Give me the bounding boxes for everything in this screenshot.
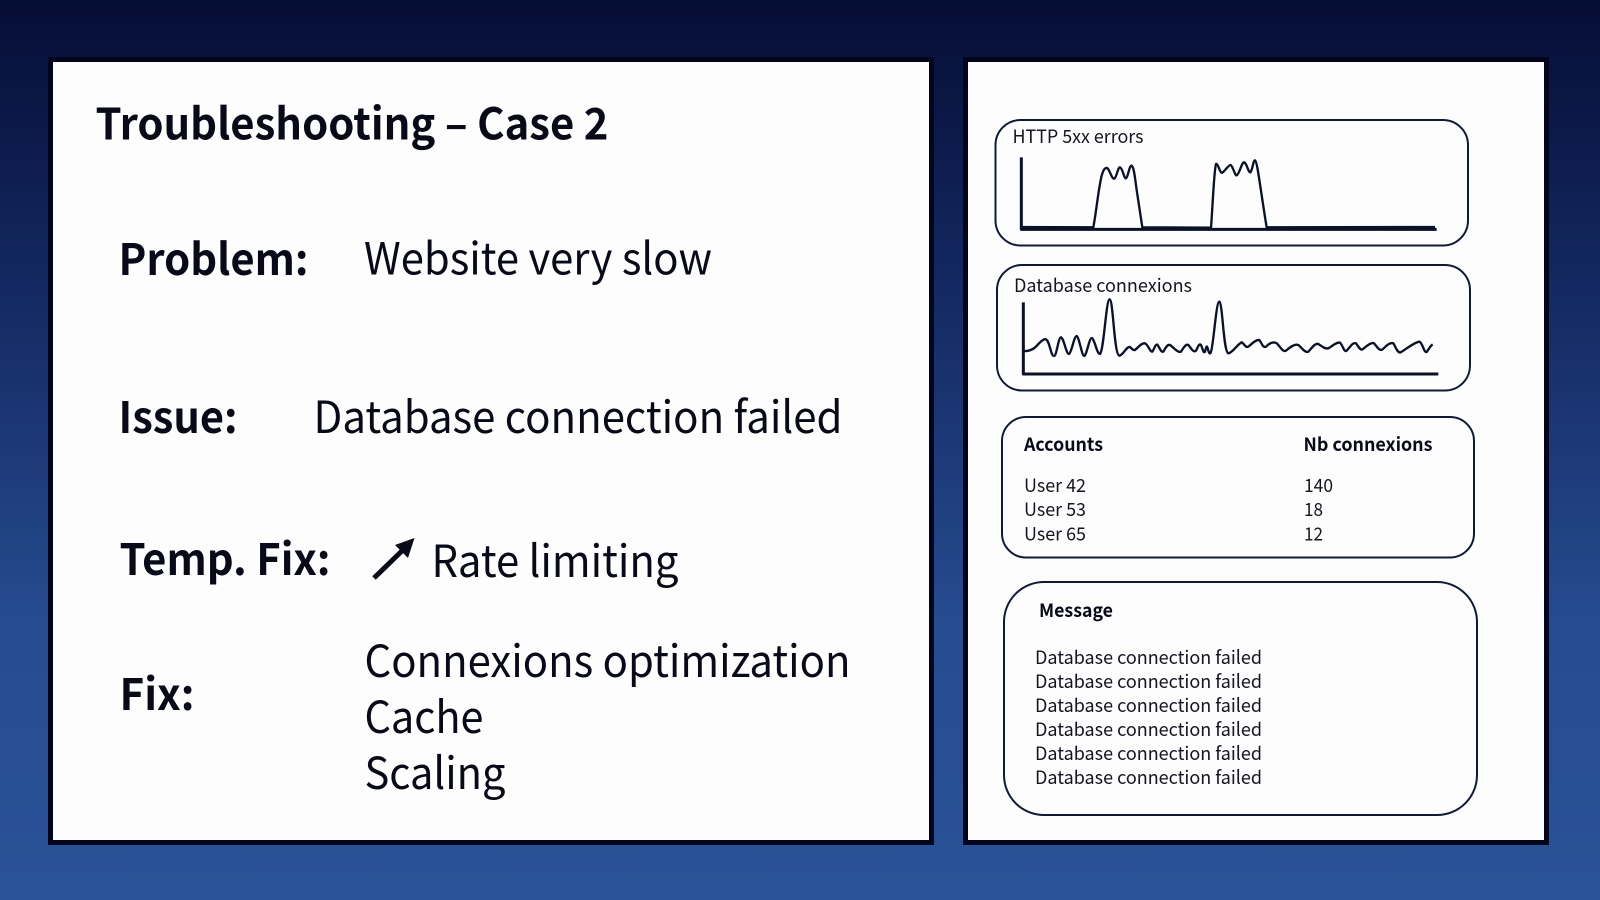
log: messages: Database connection failed <box>1035 740 1262 766</box>
table: accounts and connexions <box>1002 417 1474 558</box>
temporary fix text: Rate limiting <box>432 526 679 590</box>
table: accounts and connexions: 12 <box>1304 520 1323 546</box>
issue label: Issue: <box>118 383 238 446</box>
table: accounts and connexions: User 65 <box>1024 520 1086 546</box>
chart: HTTP 5xx errors: HTTP 5xx errors <box>1012 123 1144 149</box>
log: messages: Database connection failed <box>1035 716 1262 742</box>
log: messages: Message <box>1039 597 1113 623</box>
log: messages: Database connection failed <box>1035 668 1262 694</box>
panel: monitoring evidence <box>966 60 1546 842</box>
title: Troubleshooting – Case 2 <box>96 90 608 152</box>
temporary fix label: Temp. Fix: <box>120 525 330 588</box>
table: accounts and connexions: Accounts <box>1023 431 1103 457</box>
icon: up arrow <box>374 538 414 578</box>
chart: database connexions <box>997 265 1470 390</box>
problem text: Website very slow <box>364 224 712 288</box>
log: messages: Database connection failed <box>1035 692 1262 718</box>
problem label: Problem: <box>118 225 308 288</box>
fix label: Fix: <box>120 660 194 723</box>
chart: database connexions: Database connexions <box>1014 272 1192 298</box>
log: messages: Database connection failed <box>1035 764 1262 790</box>
fix list: Cache <box>364 682 484 746</box>
fix list: Scaling <box>364 738 506 802</box>
fix list: Connexions optimization <box>364 626 850 690</box>
log: messages <box>1004 582 1477 815</box>
table: accounts and connexions: 18 <box>1304 496 1323 522</box>
table: accounts and connexions: 140 <box>1304 472 1333 498</box>
issue text: Database connection failed <box>314 382 842 446</box>
fix list <box>364 626 850 802</box>
panel: troubleshooting summary <box>50 60 932 842</box>
chart: HTTP 5xx errors <box>996 120 1468 246</box>
table: accounts and connexions: Nb connexions <box>1304 431 1432 457</box>
table: accounts and connexions: User 42 <box>1024 472 1086 498</box>
log: messages: Database connection failed <box>1035 644 1262 670</box>
table: accounts and connexions: User 53 <box>1024 496 1086 522</box>
